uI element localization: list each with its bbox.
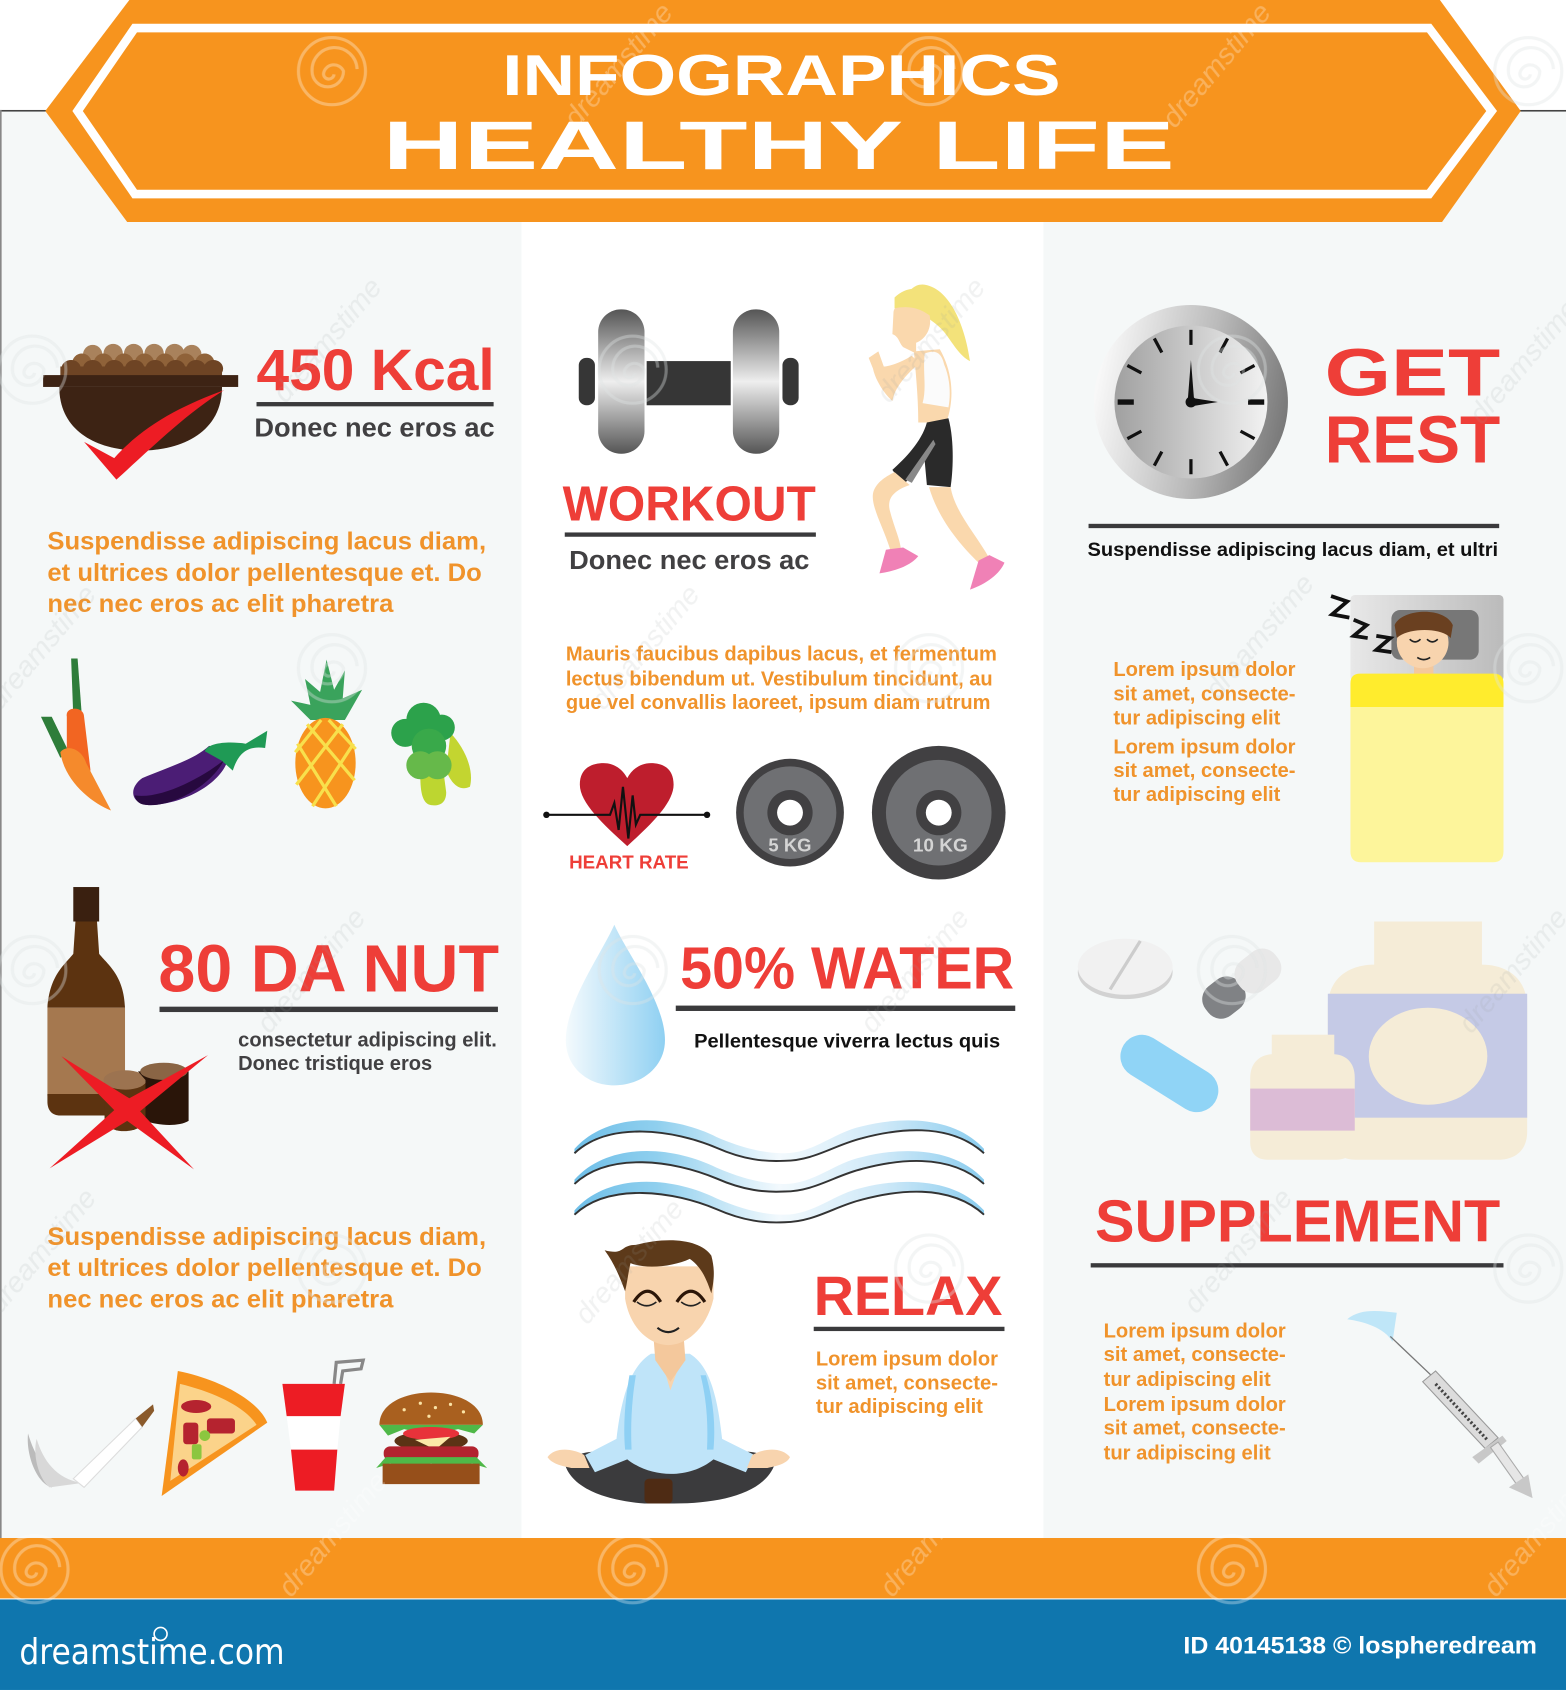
icon: jogging woman [869,285,1004,590]
icon: bowl with check mark [43,344,238,480]
icon: pizza [162,1371,267,1496]
icon: water drop [566,925,665,1085]
subtext: Donec tristique eros [238,1053,432,1075]
text block [1104,1321,1286,1464]
text block [47,529,486,618]
watermark text on panels [0,272,1566,1330]
header banner [45,0,1521,222]
watermark text on panels: dreamstime [568,1193,690,1330]
panel: supplement [1078,922,1533,1498]
watermark text on panels: dreamstime [1199,568,1321,705]
text block: Suspendisse adipiscing lacus diam, [47,529,486,556]
icon: pineapple [291,660,362,808]
icon: 10 kg weight plate [872,746,1006,879]
panel: calories [43,338,495,618]
text block: Suspendisse adipiscing lacus diam, [47,1224,486,1251]
footer blue band [0,1599,1566,1690]
subtext: consectetur adipiscing elit. [238,1030,497,1052]
panel: rest [1087,305,1503,862]
text block: Lorem ipsum dolor [816,1349,998,1371]
icon: round tablet [1078,939,1173,999]
text block: nec nec eros ac elit pharetra [47,591,394,618]
text block: tur adipiscing elit [816,1396,983,1418]
watermark text on orange [272,0,1566,1603]
text block: tur adipiscing elit [1113,707,1281,729]
icon: broccoli [391,703,471,805]
icon: 5 kg weight plate: 5 KG [768,834,812,855]
panel: alcohol warning [47,887,499,1313]
footer logo text: dreamstime.com [19,1632,285,1673]
title line 2: HEALTHY LIFE [383,107,1175,184]
text block: Mauris faucibus dapibus lacus, et fermentum [566,644,997,666]
icon: large supplement jar [1328,922,1527,1160]
title line 1: INFOGRAPHICS [502,44,1061,108]
watermark text on orange: dreamstime [873,1466,995,1603]
subtext: Suspendisse adipiscing lacus diam, et ultri [1087,539,1498,561]
icon: small supplement jar [1250,1035,1355,1160]
watermark text on panels: dreamstime [584,579,707,716]
text block [816,1349,998,1418]
heading: 450 Kcal: 450 Kcal [257,338,495,403]
text block: Lorem ipsum dolor [1113,659,1296,681]
heading: 50% WATER: 50% WATER [680,934,1014,1001]
text block [47,1224,486,1313]
watermark text on panels: dreamstime [1177,1182,1299,1319]
subtext: Pellentesque viverra lectus quis [694,1031,1000,1053]
watermark text on panels: dreamstime [854,902,976,1039]
icon: bottle and logs with red cross [47,887,208,1169]
text block: Lorem ipsum dolor [1113,736,1296,758]
subtext [238,1030,497,1075]
text block: gue vel convallis laoreet, ipsum diam rutrum [566,692,990,714]
watermark text on orange: dreamstime [1156,0,1278,134]
text block: lectus bibendum ut. Vestibulum tincidunt, au [566,668,993,690]
icon: cigarette [28,1404,154,1487]
heading: GET REST [1325,337,1500,477]
heading: RELAX: RELAX [814,1264,1002,1327]
text block: sit amet, consecte- [1104,1418,1286,1440]
icon: sleep letters [1331,596,1391,652]
watermark text on panels: dreamstime [870,272,992,409]
icon: sleeping man in bed [1331,595,1503,862]
label: heart rate: HEART RATE [569,852,689,873]
text block: nec nec eros ac elit pharetra [47,1286,394,1313]
panel: workout [543,285,1006,879]
icon: heart rate [543,763,710,873]
icon: waves [574,1120,984,1222]
text block: tur adipiscing elit [1104,1442,1271,1464]
text block: Lorem ipsum dolor [1104,1394,1286,1416]
heading: GET REST: GET [1325,337,1500,411]
footer credit: ID 40145138 © lospheredream [1183,1633,1537,1659]
heading: SUPPLEMENT: SUPPLEMENT [1095,1188,1500,1255]
subheading: Donec nec eros ac [254,415,495,443]
footer orange band [0,1538,1566,1598]
watermark text on panels: dreamstime [266,272,389,409]
watermark text on orange: dreamstime [272,1466,394,1603]
icon: carrots [41,659,111,811]
subheading: Donec nec eros ac [569,547,809,575]
text block: sit amet, consecte- [1113,684,1295,706]
icon: drink cup [282,1360,363,1491]
icon: blue capsule [1112,1027,1227,1120]
watermark spirals [1,38,1265,1603]
icon: grey capsule [1196,942,1288,1025]
text block [566,644,997,714]
text block: et ultrices dolor pellentesque et. Do [47,1255,482,1282]
heading: WORKOUT: WORKOUT [563,476,816,532]
icon: wall clock [1094,305,1288,499]
icon: 5 kg weight plate [736,759,844,867]
text block: et ultrices dolor pellentesque et. Do [47,560,482,587]
watermark text on panels: dreamstime [250,902,372,1039]
text block: Lorem ipsum dolor [1104,1321,1286,1343]
heading: GET REST: REST [1325,403,1500,477]
icon: eggplant [133,731,267,805]
watermark text on orange: dreamstime [557,0,680,134]
icon: syringe [1347,1311,1533,1498]
heading: 80 DA NUT: 80 DA NUT [158,933,499,1007]
footer logo swirl [154,1627,167,1640]
icon: burger [376,1393,487,1484]
panel: water [566,925,1015,1222]
text block: tur adipiscing elit [1113,784,1281,806]
watermark spirals on panels [0,38,1562,1302]
text block: sit amet, consecte- [1104,1344,1286,1366]
text block: tur adipiscing elit [1104,1369,1271,1391]
text block [1113,659,1296,806]
panel: relax [548,1240,1004,1504]
icon: meditating man [548,1240,790,1504]
text block: sit amet, consecte- [816,1372,998,1394]
icon: dumbbell [579,309,799,454]
text block: sit amet, consecte- [1113,760,1295,782]
icon: 10 kg weight plate: 10 KG [913,834,968,855]
